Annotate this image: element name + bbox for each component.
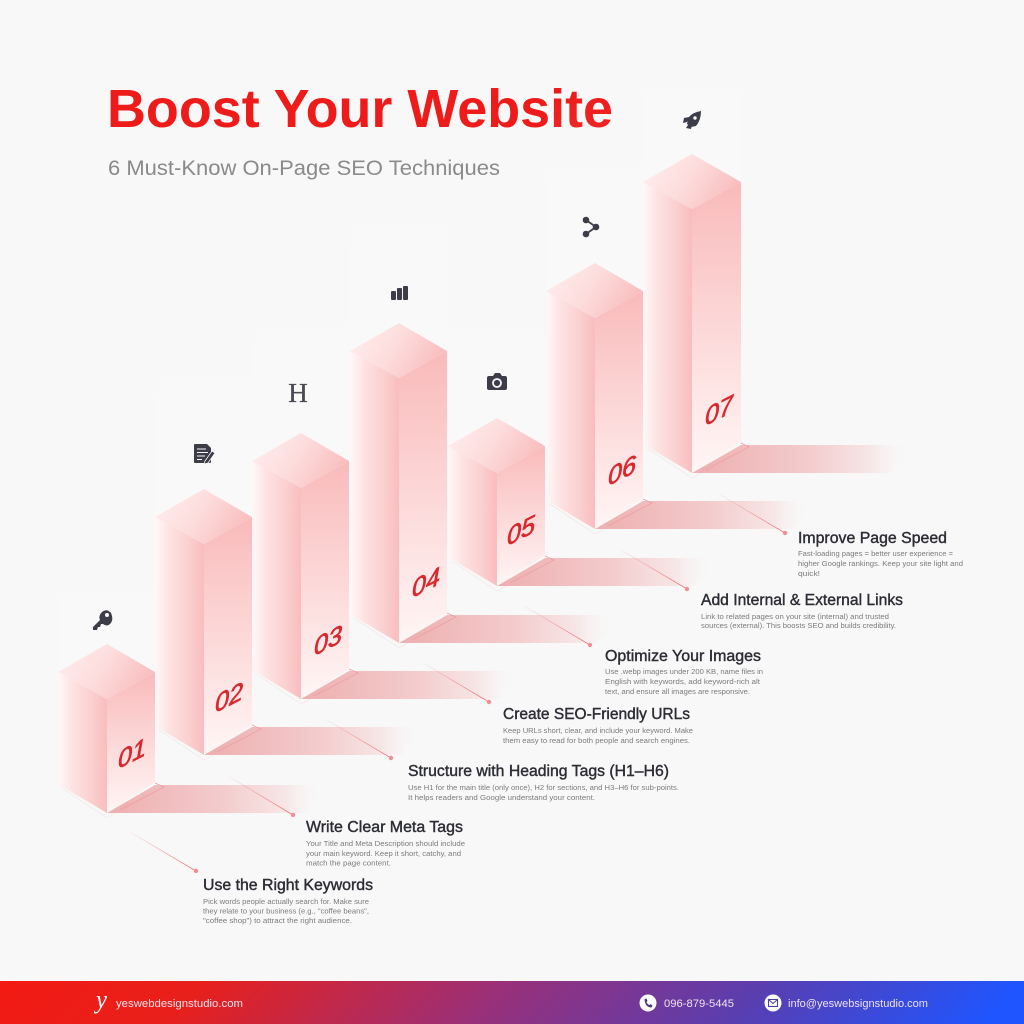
step 5 text: English with keywords, add keyword-rich alt (605, 677, 761, 686)
icon: rocket (683, 111, 701, 129)
step 6 text: Link to related pages on your site (internal) and trusted (701, 612, 889, 621)
footer email (764, 994, 928, 1012)
footer phone: 096-879-5445 (664, 998, 734, 1010)
step 7 text: Improve Page Speed (798, 530, 947, 547)
icon: key (93, 610, 112, 630)
column 06 (546, 90, 823, 534)
column 03: 03 (314, 619, 342, 662)
step 1 text: they relate to your business (e.g., "coffee beans", (203, 906, 369, 916)
icon: H heading: H (288, 378, 308, 408)
step 4 text: Create SEO-Friendly URLs (503, 706, 690, 723)
step 6 text: sources (external). This boosts SEO and builds credibility. (701, 621, 896, 630)
step 3 text: Structure with Heading Tags (H1–H6) (408, 763, 669, 780)
step 2 text (306, 819, 465, 868)
step 1 text (203, 877, 373, 925)
column 04 (350, 150, 627, 648)
step 5 text (605, 648, 763, 696)
step 7 text: Fast-loading pages = better user experience = (798, 549, 954, 558)
step 2 text: Your Title and Meta Description should include (306, 839, 465, 848)
column 07 (643, 30, 921, 478)
step 5 text: Use .webp images under 200 KB, name files in (605, 667, 763, 676)
title: Boost Your Website (107, 79, 613, 139)
step 1 text: Use the Right Keywords (203, 877, 373, 894)
footer logo and website: yeswebdesignstudio.com (116, 998, 243, 1010)
footer bar (0, 981, 1024, 1024)
column 02: 02 (215, 676, 243, 719)
step 5 text: text, and ensure all images are responsive. (605, 687, 750, 696)
icon: share links (583, 217, 599, 237)
step 7 text: quick! (798, 569, 820, 578)
column 06: 06 (608, 449, 636, 492)
column 07: 07 (705, 389, 734, 432)
step 2 text: match the page content. (306, 858, 391, 868)
step 3 text: It helps readers and Google understand your content. (408, 793, 595, 802)
column 01 (58, 540, 335, 818)
step 4 text: Keep URLs short, clear, and include your keyword. Make (503, 726, 693, 735)
step 7 text: higher Google rankings. Keep your site light and (798, 559, 963, 568)
leader lines (130, 494, 787, 873)
step 6 text: Add Internal & External Links (701, 592, 903, 609)
icon: camera (487, 373, 507, 390)
step 1 text: "coffee shop") to attract the right audience. (203, 916, 352, 925)
footer phone (640, 994, 734, 1012)
icon: document with pen (194, 444, 215, 464)
footer email: info@yeswebsignstudio.com (788, 998, 928, 1010)
step 6 text (701, 592, 903, 630)
step 1 text: Pick words people actually search for. Make sure (203, 897, 369, 906)
column 04: 04 (412, 561, 440, 604)
step 3 text: Use H1 for the main title (only once), H2 for sections, and H3–H6 for sub-points. (408, 783, 679, 792)
step 5 text: Optimize Your Images (605, 648, 761, 665)
column 02 (155, 300, 432, 760)
subtitle: 6 Must-Know On-Page SEO Techniques (108, 157, 500, 180)
step 4 text (503, 706, 693, 745)
column 05: 05 (507, 509, 535, 552)
footer logo and website: y (93, 985, 107, 1014)
footer logo and website (93, 985, 243, 1014)
column 05 (448, 260, 725, 591)
column 01: 01 (118, 732, 146, 775)
step 7 text (798, 530, 963, 578)
step 4 text: them easy to read for both people and search engines. (503, 736, 690, 745)
step 2 text: Write Clear Meta Tags (306, 819, 463, 836)
icon: bar chart (391, 286, 408, 300)
step 3 text (408, 763, 679, 802)
column 03 (252, 250, 529, 704)
step 2 text: your main keyword. Keep it short, catchy, and (306, 849, 461, 858)
